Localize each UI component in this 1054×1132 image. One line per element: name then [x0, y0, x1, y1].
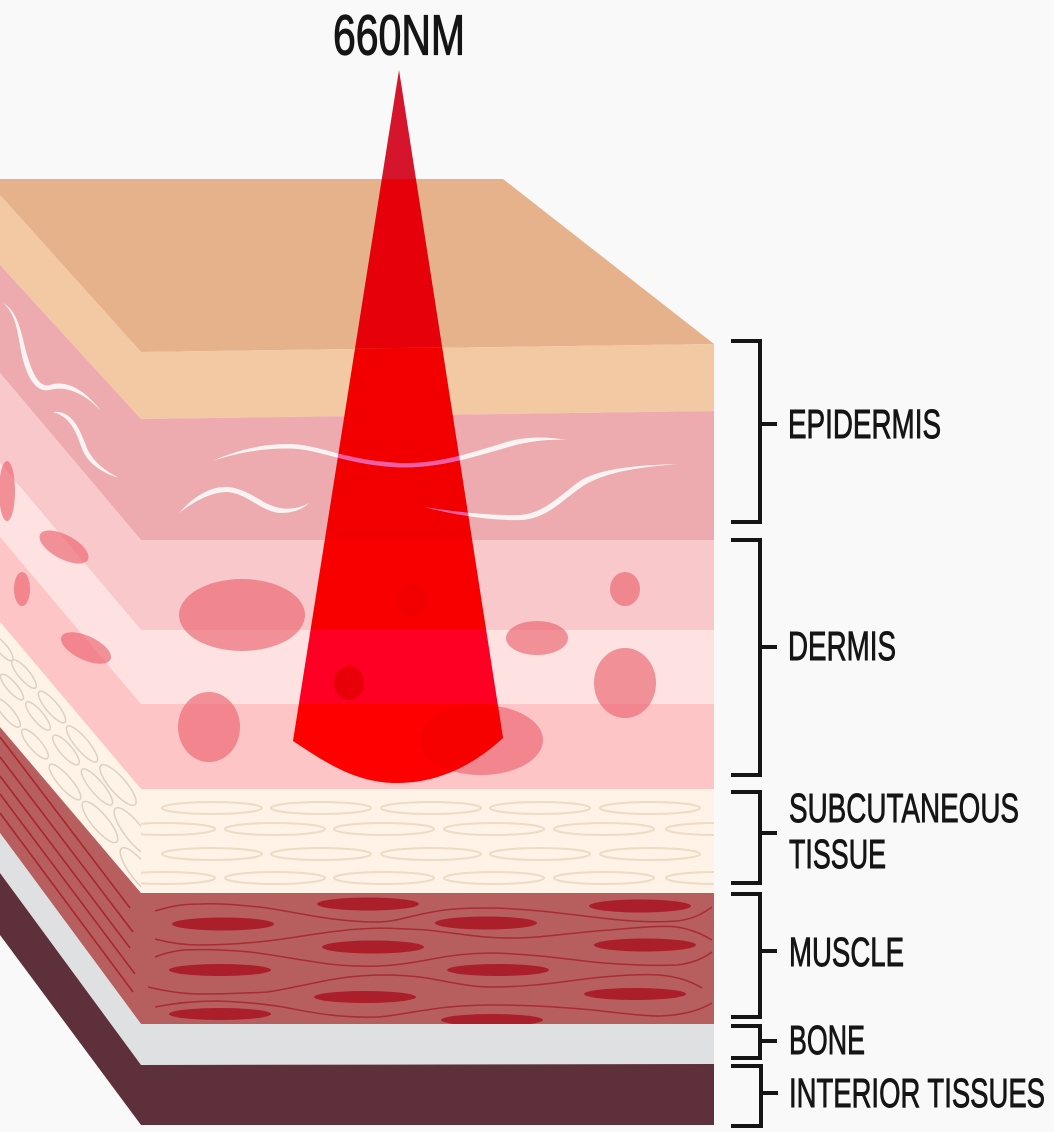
bracket and label: epidermis [731, 341, 941, 522]
title: wavelength: 660NM [333, 4, 465, 68]
bracket and label: bone [731, 1017, 865, 1063]
layer: bone [0, 833, 714, 1065]
layer: upper dermis [0, 373, 714, 630]
bracket and label: dermis: DERMIS [788, 623, 896, 669]
layer: interior tissues [0, 873, 714, 1125]
muscle fibres: side [0, 737, 135, 992]
muscle cells [169, 898, 696, 1026]
bracket and label: epidermis: EPIDERMIS [788, 401, 941, 447]
bracket and label: interior tissues [731, 1066, 1045, 1126]
subcutaneous fat cells: side [0, 638, 141, 888]
bracket and label: muscle [731, 894, 904, 1017]
layer: epidermis outer band [0, 195, 714, 419]
skin block diagram [0, 179, 714, 1125]
dermis blobs: blood vessels and cells [0, 461, 656, 775]
layer: skin top surface [0, 179, 714, 352]
bracket and label: bone: BONE [789, 1017, 865, 1063]
layer: lower dermis [0, 537, 714, 789]
bracket and label: muscle: MUSCLE [789, 929, 904, 975]
layer: middle dermis [0, 463, 714, 704]
bracket and label: dermis [731, 540, 896, 775]
layer: muscle [0, 727, 714, 1024]
layer: subcutaneous tissue [0, 622, 714, 893]
red light beam [293, 70, 503, 783]
subcutaneous fat cells: front [115, 802, 766, 884]
bracket and label: subcutaneous tissue: TISSUE [789, 831, 886, 877]
muscle fibres: front [148, 904, 712, 1017]
white fibres in epidermis [3, 303, 678, 520]
fibres seen through the beam [338, 454, 460, 468]
bracket and label: subcutaneous tissue [731, 785, 1019, 883]
layer: epidermis pink band [0, 265, 714, 540]
blobs seen through the beam [334, 666, 364, 700]
